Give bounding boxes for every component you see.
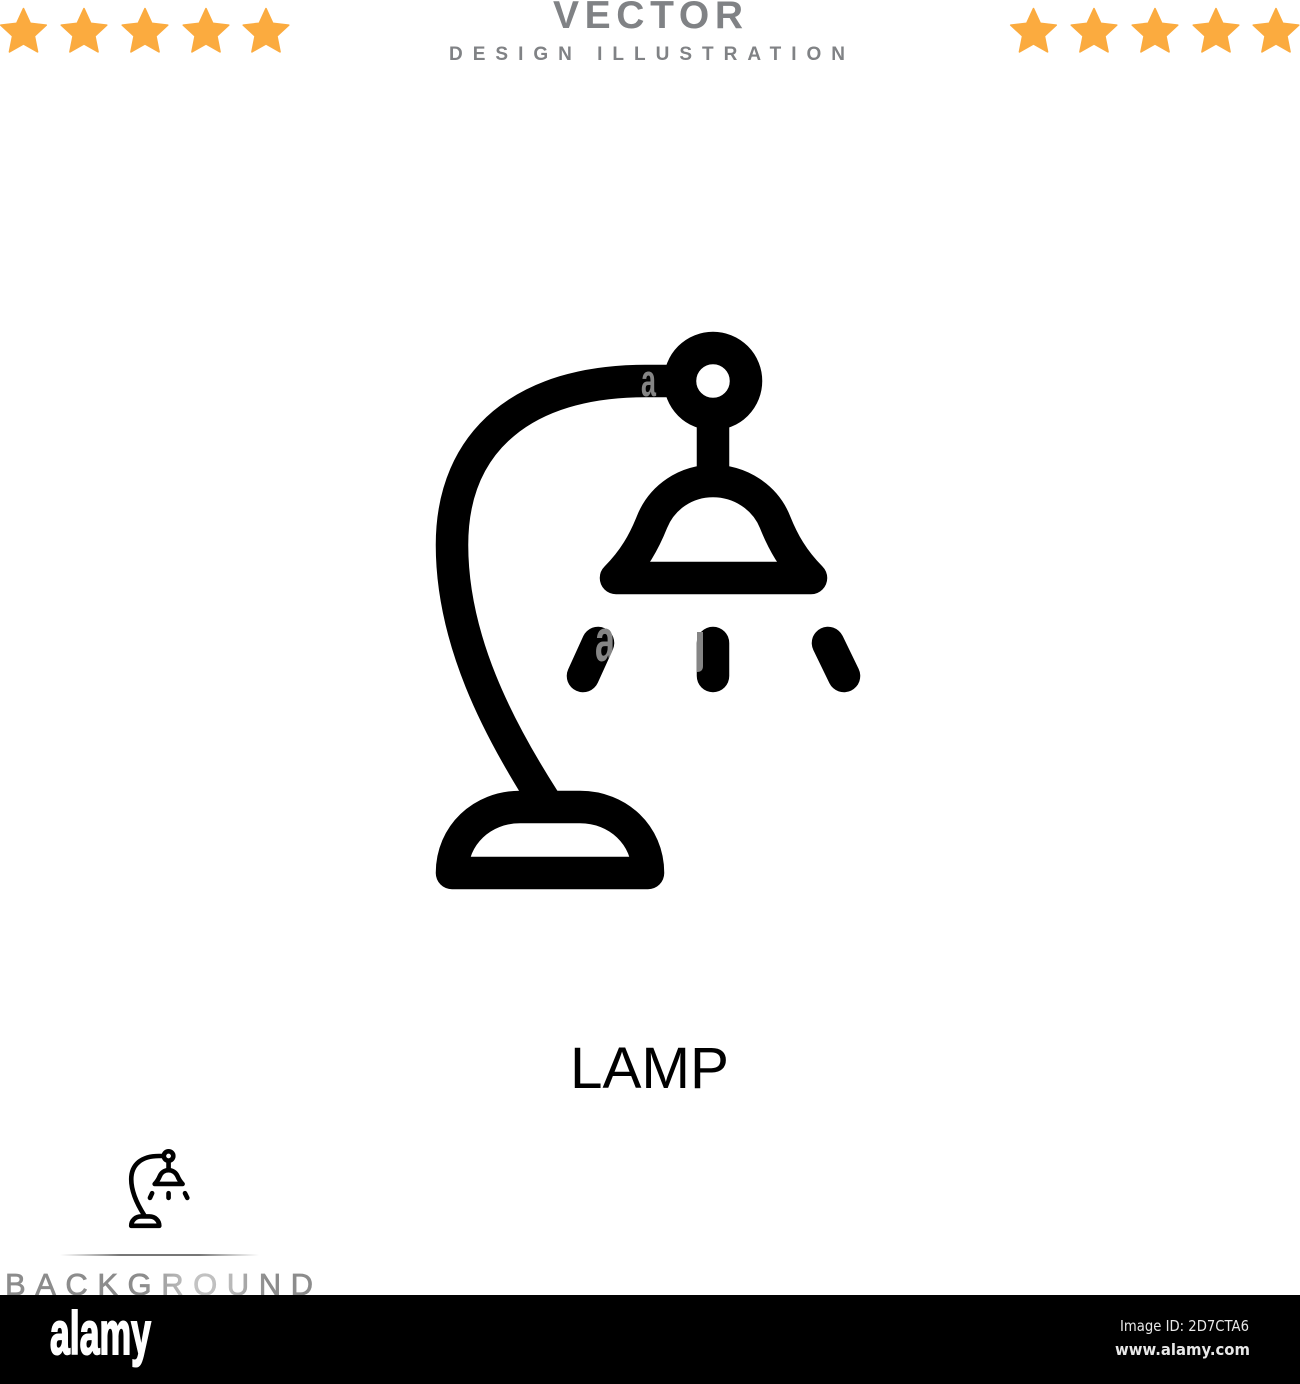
right star rating: [1011, 8, 1299, 52]
logo: alamy: alamy: [50, 1300, 151, 1367]
caption: BACKGROUND: BACKGROUND: [5, 1267, 313, 1302]
image id: Image ID: 2D7CTA6: [1120, 1317, 1249, 1335]
website: www.alamy.com: [1115, 1340, 1250, 1359]
footer bar: [0, 1295, 1300, 1384]
watermark letters on lamp: [595, 355, 703, 674]
icon: large desk lamp: [452, 348, 844, 873]
watermark letters on lamp: a: [641, 355, 657, 406]
label: LAMP: LAMP: [570, 1036, 729, 1101]
icon: small desk lamp: [131, 1151, 187, 1226]
subheading: DESIGN ILLUSTRATION: DESIGN ILLUSTRATION: [449, 44, 845, 65]
left star rating: [1, 8, 289, 52]
watermark letters on lamp: a: [595, 607, 615, 674]
